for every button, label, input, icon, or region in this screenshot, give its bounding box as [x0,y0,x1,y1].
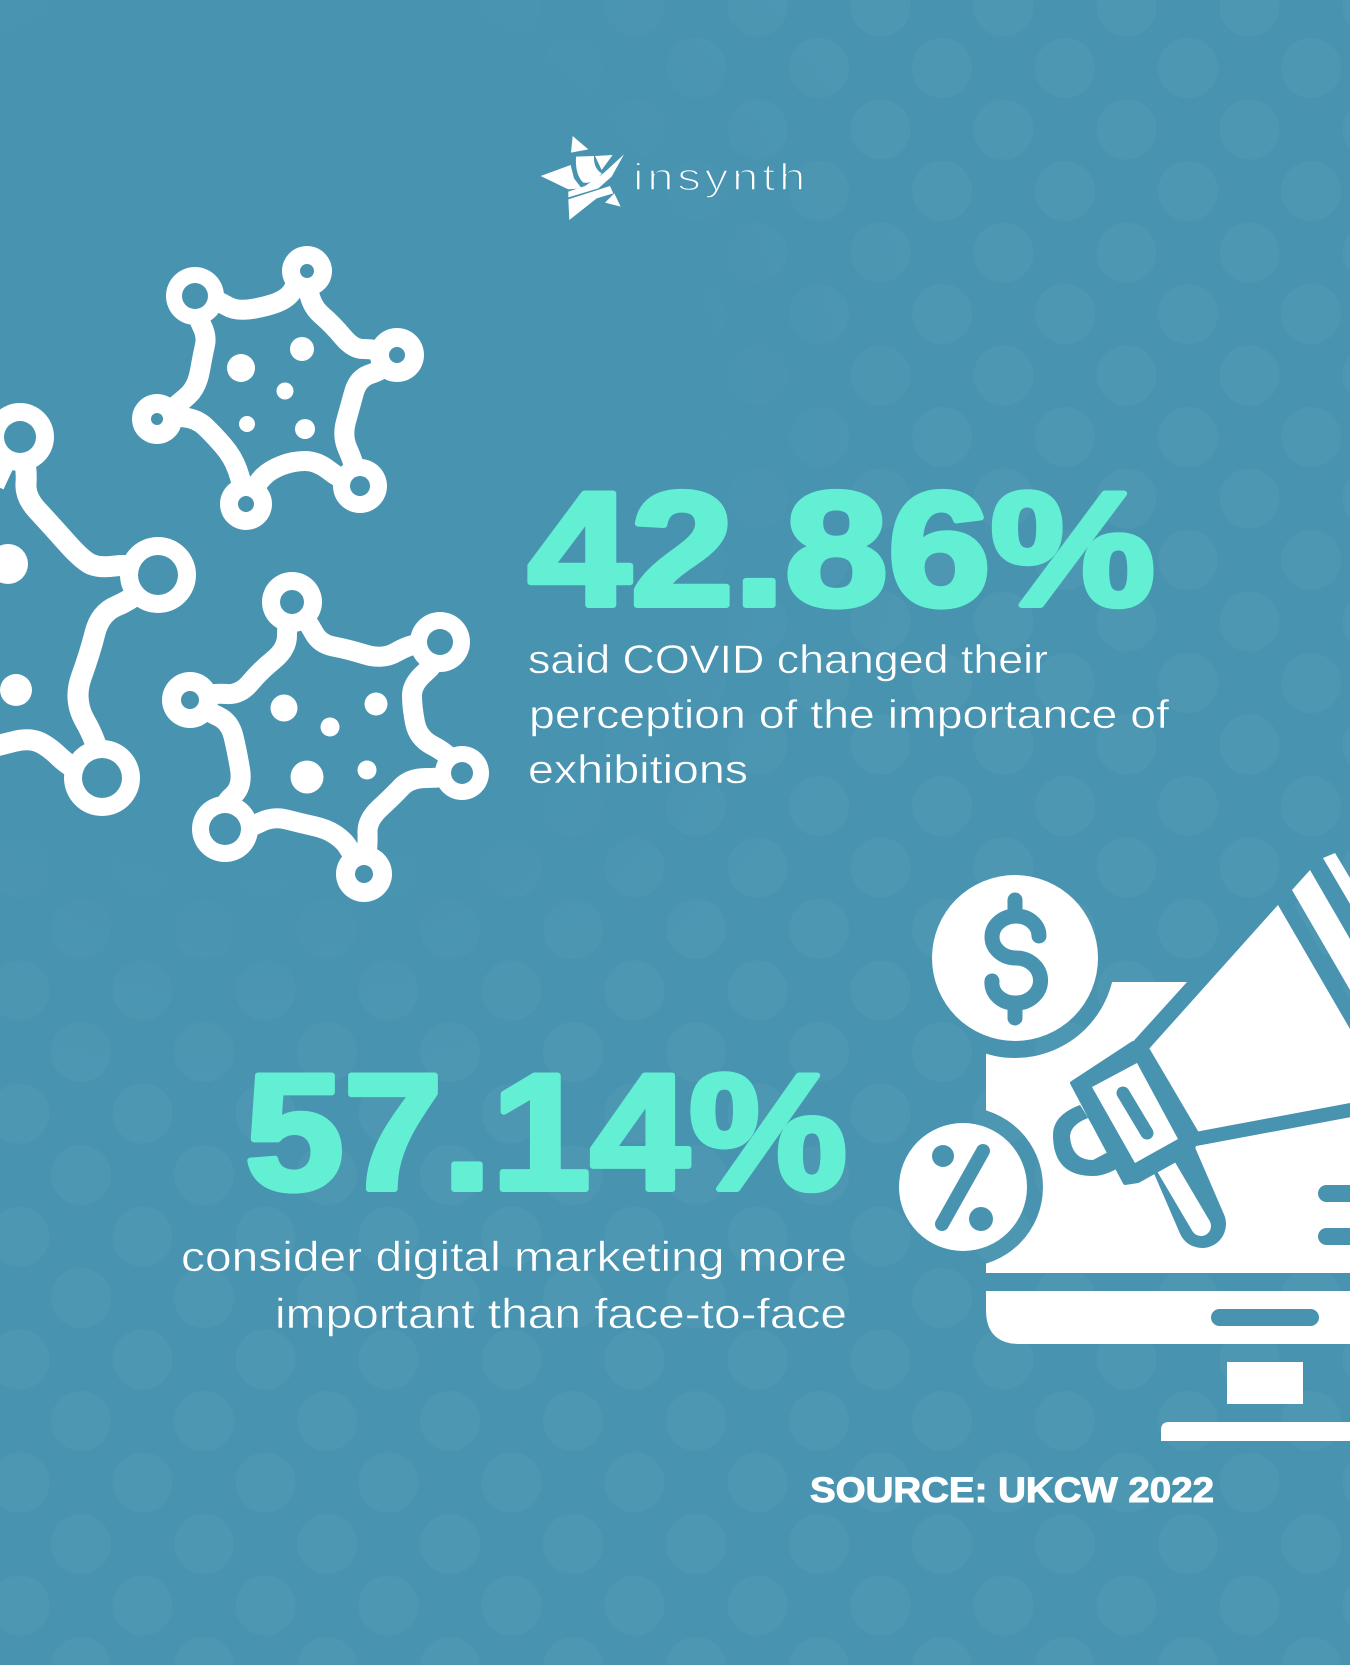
cone [1148,905,1350,1132]
text: digital marketing description [181,1233,847,1337]
icon: fractured star [541,136,624,220]
collar [1072,1043,1198,1183]
monitor screen [986,982,1350,1273]
percent coin [899,1123,1027,1251]
rear cap [1053,1105,1120,1176]
monitor lower bezel [986,1291,1350,1344]
wordmark: insynth [633,157,809,199]
text: covid description: said COVID changed their [528,638,1048,682]
icon: virus left (cropped) [0,403,196,816]
source note: SOURCE: UKCW 2022 [810,1471,1214,1510]
text: digital marketing description: consider digital marketing more [181,1233,847,1280]
icon: virus bottom [162,572,489,902]
monitor stand [1227,1362,1303,1404]
text: covid description: exhibitions [528,748,748,792]
icon: virus top [132,246,424,530]
handle [1170,1150,1202,1224]
text: covid description [528,638,1170,792]
sound bands [1292,870,1350,990]
stat: 57.14%: 57.14% [245,1040,847,1224]
text: digital marketing description: important than face-to-face [275,1290,847,1337]
icon: computer with megaphone [899,853,1350,1441]
stat: 42.86%: 42.86% [528,459,1155,640]
bezel bar [1211,1309,1319,1326]
dollar coin [932,875,1098,1041]
monitor base [1161,1422,1350,1441]
logo: insynth [541,136,809,220]
screen lines [1318,1185,1350,1245]
text: covid description: perception of the importance of [529,693,1170,737]
megaphone [1053,853,1350,1226]
